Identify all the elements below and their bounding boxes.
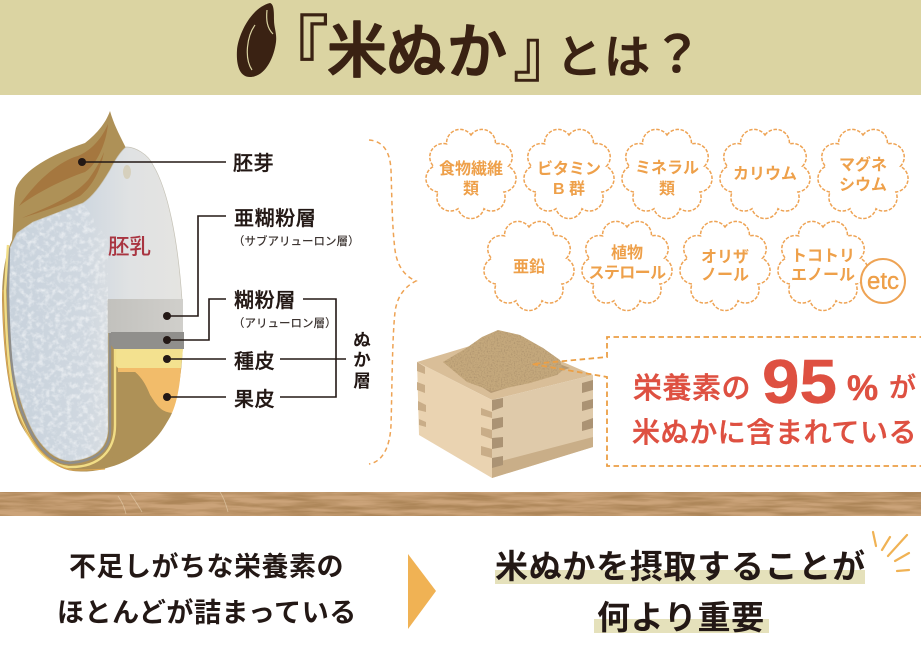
title: ？ <box>652 27 702 83</box>
title: 『 <box>258 11 329 90</box>
labels: （アリューロン層） <box>233 317 336 330</box>
nutrient flowers <box>426 129 908 311</box>
label: bran layer vertical: ぬ <box>353 330 371 350</box>
endosperm <box>9 147 182 461</box>
labels: 糊粉層 <box>234 289 296 312</box>
icon: rice seed <box>237 3 276 77</box>
flower: phytosterol <box>582 221 672 311</box>
endosperm texture <box>9 203 108 461</box>
box lower stripe <box>492 437 593 478</box>
emphasised text: 米ぬかを摂取することが <box>495 548 866 585</box>
etc badge: etc <box>867 268 899 295</box>
flower: vitamin B: B 群 <box>553 180 585 198</box>
brace <box>369 140 416 464</box>
flower: oryzanol: オリザ <box>701 248 749 266</box>
box inner wall <box>443 343 570 393</box>
conclusion left text: ほとんどが詰まっている <box>57 597 357 628</box>
callout outline <box>532 337 921 466</box>
flower: tocotrienol: トコトリ <box>791 248 855 265</box>
leader dots <box>78 158 171 401</box>
title <box>258 11 702 90</box>
flower: zinc <box>484 221 574 311</box>
label: bran layer vertical: か <box>353 350 371 370</box>
title: 』 <box>513 18 577 90</box>
wooden masu with bran <box>417 330 593 478</box>
flower: potassium <box>720 129 810 219</box>
rice grain diagram <box>2 111 371 472</box>
callout text: 米ぬかに含まれている <box>632 417 917 448</box>
bran pile <box>443 330 563 391</box>
box joints <box>417 362 492 458</box>
flower: vitamin B: ビタミン <box>537 159 601 178</box>
callout box <box>532 337 921 466</box>
box right face <box>492 375 593 478</box>
labels: 果皮 <box>234 388 275 411</box>
layer: aleurone <box>111 332 184 349</box>
label: endosperm: 胚乳 <box>108 235 151 259</box>
flower: dietary fiber <box>426 129 516 219</box>
flower: dietary fiber: 類 <box>463 180 479 198</box>
title: ぬ <box>386 19 446 86</box>
labels: 種皮 <box>234 350 275 373</box>
arrow <box>408 554 436 629</box>
bran texture <box>443 330 563 391</box>
title: 米 <box>327 18 387 85</box>
flower: minerals: 類 <box>659 180 675 198</box>
callout text: 栄養素の <box>633 372 751 405</box>
header band <box>0 0 921 95</box>
grain husk <box>2 111 183 472</box>
callout text <box>632 348 917 448</box>
layer: sub-aleurone <box>108 299 183 333</box>
callout text: 95 <box>762 348 837 417</box>
layer: seed coat <box>114 349 183 368</box>
flower: magnesium: シウム <box>839 176 887 194</box>
title: は <box>604 31 650 83</box>
flower: phytosterol: ステロール <box>588 265 666 282</box>
flower: zinc: 亜鉛 <box>513 258 545 276</box>
flower: potassium: カリウム <box>733 165 797 183</box>
flower: vitamin B <box>524 129 614 219</box>
endosperm speck <box>123 165 131 179</box>
flower: minerals <box>622 129 712 219</box>
leader lines <box>82 162 346 397</box>
conclusion left text: 不足しがちな栄養素の <box>69 551 344 582</box>
flower: magnesium <box>818 129 908 219</box>
label: bran layer vertical <box>353 330 371 391</box>
icon: sparkle rays <box>873 532 909 571</box>
flower: magnesium: マグネ <box>839 155 887 174</box>
flower: phytosterol: 植物 <box>611 243 643 262</box>
box left face <box>417 362 492 478</box>
wood band <box>0 492 921 516</box>
title: か <box>447 19 507 86</box>
highlight bars <box>495 570 865 584</box>
thin layers along edge <box>3 245 115 470</box>
husk lower fill <box>110 372 172 465</box>
flower: oryzanol: ノール <box>701 267 749 284</box>
labels: （サブアリューロン層） <box>233 234 360 248</box>
box top rim <box>417 336 593 400</box>
etc badge <box>861 259 905 303</box>
flower: oryzanol <box>680 221 770 311</box>
emphasised text: 何より重要 <box>597 599 765 636</box>
conclusion left text <box>57 551 357 628</box>
germ streaks <box>19 124 108 218</box>
conclusion right text <box>495 548 866 636</box>
label: bran layer vertical: 層 <box>353 371 371 391</box>
flower: tocotrienol: エノール <box>791 267 855 284</box>
emphasised text <box>495 548 866 636</box>
callout text: が <box>889 373 916 403</box>
labels: 亜糊粉層 <box>234 207 316 230</box>
flower: dietary fiber: 食物繊維 <box>439 159 503 178</box>
callout text: % <box>847 369 878 408</box>
labels: 胚芽 <box>233 152 274 175</box>
flower: tocotrienol <box>778 221 868 311</box>
title: と <box>556 31 602 83</box>
layer: pericarp <box>118 368 181 413</box>
labels <box>233 152 360 411</box>
flower: minerals: ミネラル <box>635 159 699 177</box>
